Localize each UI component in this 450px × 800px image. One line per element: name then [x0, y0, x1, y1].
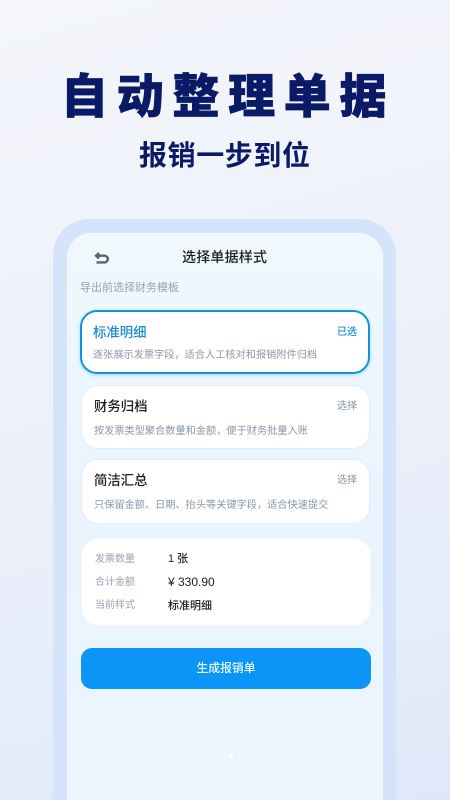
current style label: 当前样式: [95, 600, 135, 611]
card description: 逐张展示发票字段，适合人工核对和报销附件归档: [93, 350, 317, 361]
subtitle: 报销一步到位: [139, 140, 311, 171]
card name: 标准明细: [93, 325, 147, 340]
panel: invoice summary: [81, 538, 371, 626]
generate button: 生成报销单: [196, 661, 256, 675]
invoice count value: 1 张: [168, 553, 188, 565]
total amount label: 合计金额: [95, 577, 135, 588]
phone screen: [67, 233, 383, 800]
select tag: 选择: [337, 475, 357, 486]
title: 自动整理单据: [61, 70, 395, 123]
panel: finance archive card: [81, 385, 370, 449]
card name: 财务归档: [94, 399, 148, 414]
selected tag: 已选: [337, 327, 357, 338]
screen heading: 选择单据样式: [182, 249, 267, 265]
icon: back arrow: [94, 252, 109, 264]
generate button: [81, 648, 371, 689]
pagination dots: [229, 754, 233, 758]
card description: 按发票类型聚合数量和金额，便于财务批量入账: [94, 426, 308, 437]
total amount value: ¥ 330.90: [168, 575, 215, 589]
phone frame: [53, 219, 396, 800]
select tag: 选择: [337, 401, 357, 412]
invoice count label: 发票数量: [95, 554, 135, 565]
card description: 只保留金额、日期、抬头等关键字段，适合快速提交: [94, 500, 328, 511]
panel: selected card standard detail: [80, 310, 370, 374]
card name: 简洁汇总: [94, 473, 148, 488]
helper text: 导出前选择财务模板: [80, 282, 179, 294]
current style value: 标准明细: [168, 600, 212, 612]
panel: concise summary card: [81, 459, 370, 524]
